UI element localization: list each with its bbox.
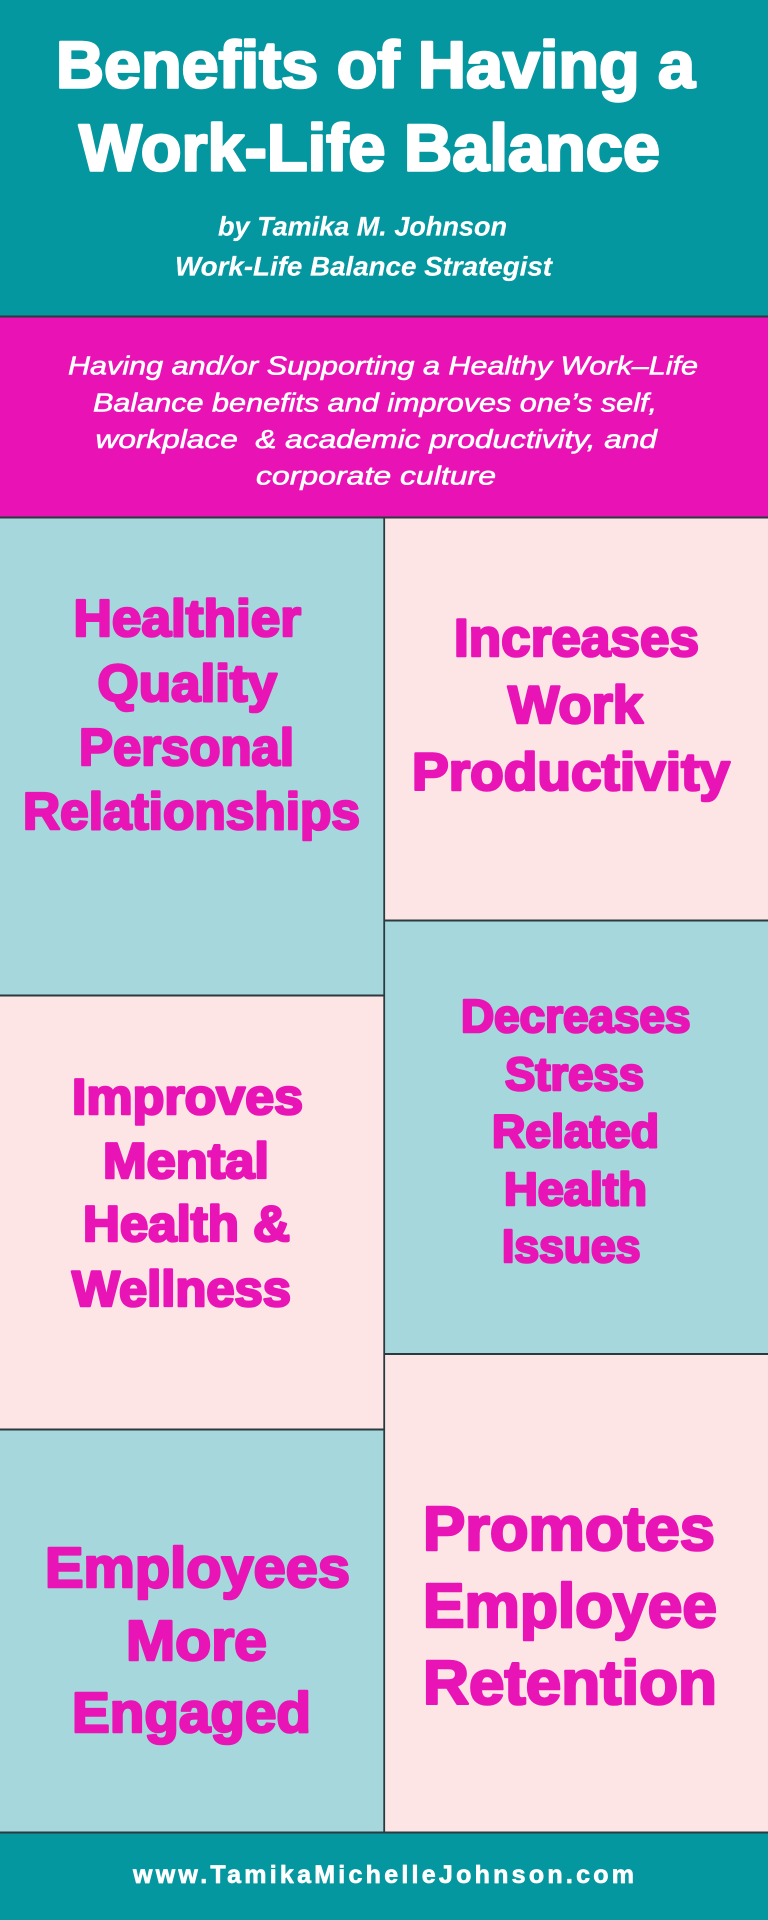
heading: improves mental health and wellness: Mental <box>103 1133 269 1189</box>
panel borders <box>0 316 768 1834</box>
heading: improves mental health and wellness: Health & <box>83 1196 290 1252</box>
heading: increases work productivity <box>412 609 731 802</box>
panel: mental health <box>0 995 384 1429</box>
heading: employees more engaged: Engaged <box>72 1681 311 1745</box>
heading: decreases stress related health issues: Decreases <box>461 990 690 1042</box>
panel: header <box>0 0 768 316</box>
panel: employee engagement <box>0 1429 384 1832</box>
heading: promotes employee retention <box>423 1495 717 1718</box>
introduction text <box>68 350 698 490</box>
introduction text: Balance benefits and improves one’s self, <box>93 388 657 418</box>
title: Work-Life Balance <box>79 110 660 184</box>
introduction text: corporate culture <box>256 460 496 490</box>
panel: work productivity <box>384 517 768 920</box>
website address: www.TamikaMichelleJohnson.com <box>132 1861 634 1889</box>
heading: healthier quality personal relationships <box>23 590 360 841</box>
heading: decreases stress related health issues <box>461 990 690 1272</box>
title <box>56 28 696 184</box>
heading: decreases stress related health issues: Health <box>504 1163 647 1215</box>
author byline: Work-Life Balance Strategist <box>175 252 553 282</box>
heading: employees more engaged: More <box>126 1609 267 1673</box>
heading: promotes employee retention: Employee <box>423 1572 717 1641</box>
heading: healthier quality personal relationships: Personal <box>79 719 294 777</box>
heading: decreases stress related health issues: Related <box>492 1105 659 1157</box>
panel: footer <box>0 1832 768 1920</box>
panel: stress issues <box>384 920 768 1354</box>
heading: employees more engaged: Employees <box>45 1536 350 1600</box>
heading: improves mental health and wellness: Wellness <box>72 1261 291 1317</box>
heading: increases work productivity: Productivity <box>412 743 731 802</box>
author byline: by Tamika M. Johnson <box>218 212 507 242</box>
panel: introduction <box>0 316 768 517</box>
heading: improves mental health and wellness <box>72 1069 303 1317</box>
heading: increases work productivity: Work <box>508 676 644 735</box>
heading: healthier quality personal relationships: Quality <box>98 655 277 713</box>
panel: employee retention <box>384 1354 768 1832</box>
heading: healthier quality personal relationships: Relationships <box>23 783 360 841</box>
introduction text: workplace & academic productivity, and <box>96 424 659 454</box>
title: Benefits of Having a <box>56 28 696 102</box>
author byline <box>175 212 553 282</box>
panel: healthier relationships <box>0 517 384 995</box>
heading: increases work productivity: Increases <box>454 609 699 668</box>
heading: employees more engaged <box>45 1536 350 1745</box>
heading: promotes employee retention: Promotes <box>423 1495 715 1564</box>
heading: promotes employee retention: Retention <box>423 1649 717 1718</box>
heading: healthier quality personal relationships: Healthier <box>74 590 301 648</box>
heading: improves mental health and wellness: Improves <box>72 1069 303 1125</box>
introduction text: Having and/or Supporting a Healthy Work–Life <box>68 350 698 380</box>
heading: decreases stress related health issues: Stress <box>505 1048 644 1100</box>
heading: decreases stress related health issues: Issues <box>502 1220 640 1272</box>
